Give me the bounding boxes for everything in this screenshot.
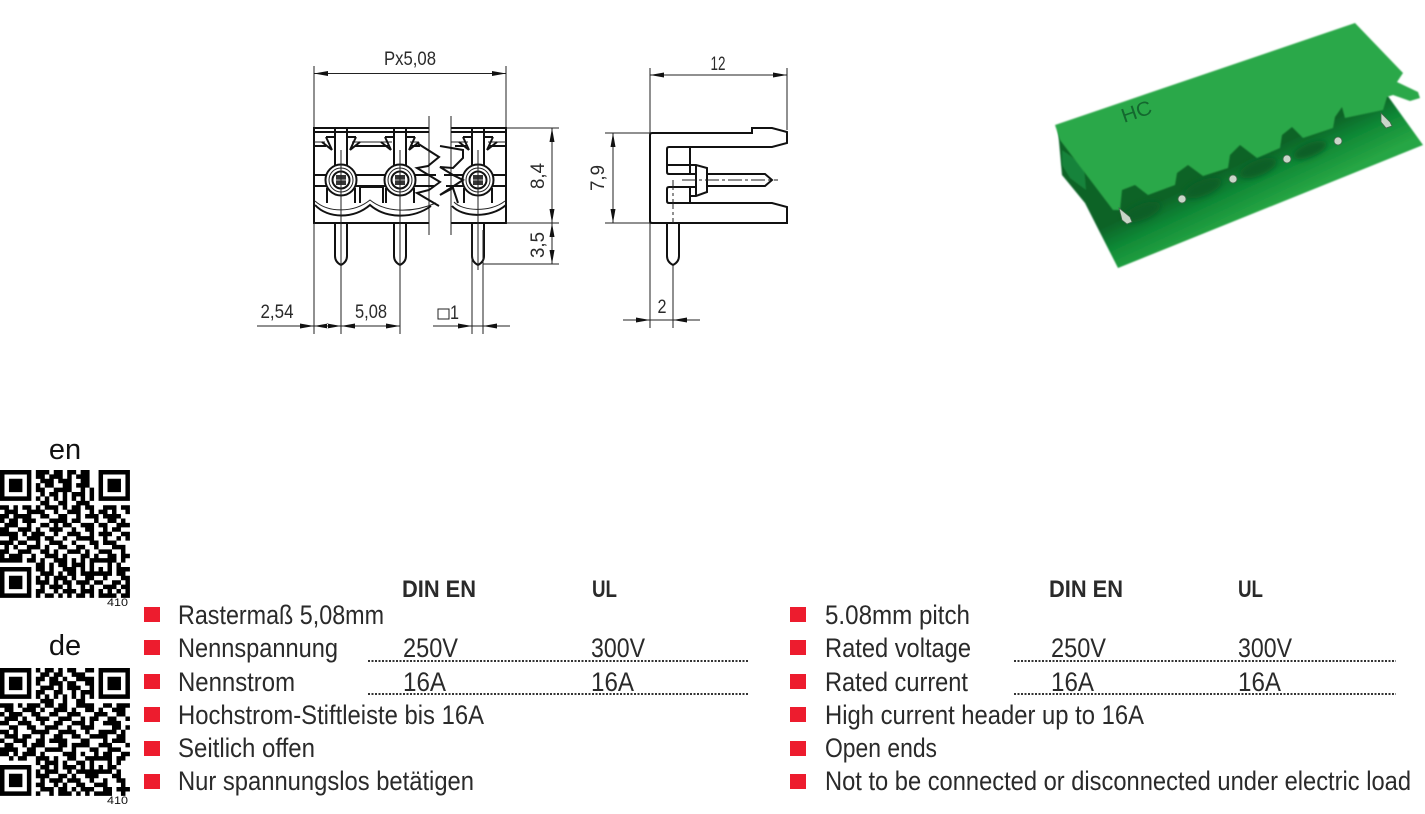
list text German: Nennstrom bbox=[178, 667, 295, 697]
list text German: Nur spannungslos betätigen bbox=[178, 766, 474, 796]
list text English: High current header up to 16A bbox=[825, 700, 1144, 730]
pins bbox=[1119, 113, 1392, 224]
tray shadows bbox=[1120, 137, 1329, 227]
dimension: square 1 bbox=[433, 230, 510, 334]
left end opening bbox=[1062, 150, 1086, 190]
dimension: Px5,08: Px5,08 bbox=[384, 49, 436, 70]
rating values German: 16A bbox=[591, 667, 634, 697]
dimension: 2,54 and 5,08: 2,54 bbox=[260, 302, 294, 323]
dimension: 8,4 and 3,5: 8,4 bbox=[528, 163, 549, 189]
side housing outline bbox=[650, 128, 787, 223]
rating values German: 16A bbox=[403, 667, 446, 697]
label de: de bbox=[49, 630, 81, 662]
side view technical drawing bbox=[588, 54, 787, 328]
front view technical drawing bbox=[257, 49, 559, 334]
table header German: UL bbox=[592, 576, 617, 603]
list text English bbox=[825, 600, 1411, 796]
code 410 de: 410 bbox=[107, 795, 128, 807]
table header English: DIN EN bbox=[1049, 576, 1123, 603]
dimension: 2: 2 bbox=[658, 297, 666, 318]
dimension: 2 bbox=[623, 223, 700, 328]
dimension: 2,54 and 5,08: 5,08 bbox=[355, 302, 387, 323]
connector housing front bbox=[314, 116, 506, 235]
dimension: 2,54 and 5,08 bbox=[257, 223, 400, 334]
specification list: English bbox=[790, 576, 1411, 796]
rating values English: 250V bbox=[1051, 633, 1106, 663]
rating values German: 250V bbox=[403, 633, 458, 663]
product photo: green header connector bbox=[1055, 23, 1423, 268]
rating values English: 16A bbox=[1238, 667, 1281, 697]
dimension: square 1: 1 bbox=[450, 303, 459, 324]
list text German: Hochstrom-Stiftleiste bis 16A bbox=[178, 700, 484, 730]
rating values English: 16A bbox=[1051, 667, 1094, 697]
list text English: Rated voltage bbox=[825, 633, 971, 663]
list text German: Nennspannung bbox=[178, 633, 338, 663]
list text English: 5.08mm pitch bbox=[825, 600, 970, 630]
list text German: Seitlich offen bbox=[178, 733, 315, 763]
table header English: UL bbox=[1238, 576, 1263, 603]
list text English: Open ends bbox=[825, 733, 937, 763]
QR matrix de bbox=[0, 670, 130, 794]
dimension: 12: 12 bbox=[710, 54, 726, 75]
dimension: 8,4 and 3,5: 3,5 bbox=[528, 232, 549, 258]
code 410 en: 410 bbox=[107, 597, 128, 609]
table header German bbox=[402, 576, 617, 603]
label en: en bbox=[49, 434, 81, 466]
side pin bbox=[667, 165, 778, 328]
QR code: en bbox=[0, 434, 130, 609]
list text German bbox=[178, 600, 484, 796]
table header English bbox=[1049, 576, 1263, 603]
pin 2 bbox=[381, 129, 419, 334]
rating values English: 300V bbox=[1238, 633, 1292, 663]
pin 1 bbox=[322, 129, 360, 334]
table header German: DIN EN bbox=[402, 576, 476, 603]
rating values English bbox=[1014, 633, 1396, 697]
bullets English bbox=[790, 607, 806, 789]
dimension: 7,9 bbox=[588, 133, 650, 223]
dimension: 12 bbox=[650, 54, 787, 133]
HC marking: HC bbox=[1118, 97, 1155, 128]
top cover bbox=[1055, 23, 1420, 210]
QR code: de bbox=[0, 630, 130, 807]
specification list: German bbox=[144, 576, 749, 796]
list text German: Rastermaß 5,08mm bbox=[178, 600, 384, 630]
lower tray bbox=[1058, 92, 1423, 268]
list text English: Rated current bbox=[825, 667, 969, 697]
pin 3 bbox=[459, 129, 497, 270]
dimension: 7,9: 7,9 bbox=[588, 165, 609, 191]
dimension: Px5,08 bbox=[314, 49, 506, 128]
rating values German bbox=[368, 633, 749, 697]
rating values German: 300V bbox=[591, 633, 645, 663]
QR matrix en bbox=[0, 472, 130, 596]
dimension: 8,4 and 3,5 bbox=[483, 128, 559, 264]
bullets German bbox=[144, 607, 160, 789]
